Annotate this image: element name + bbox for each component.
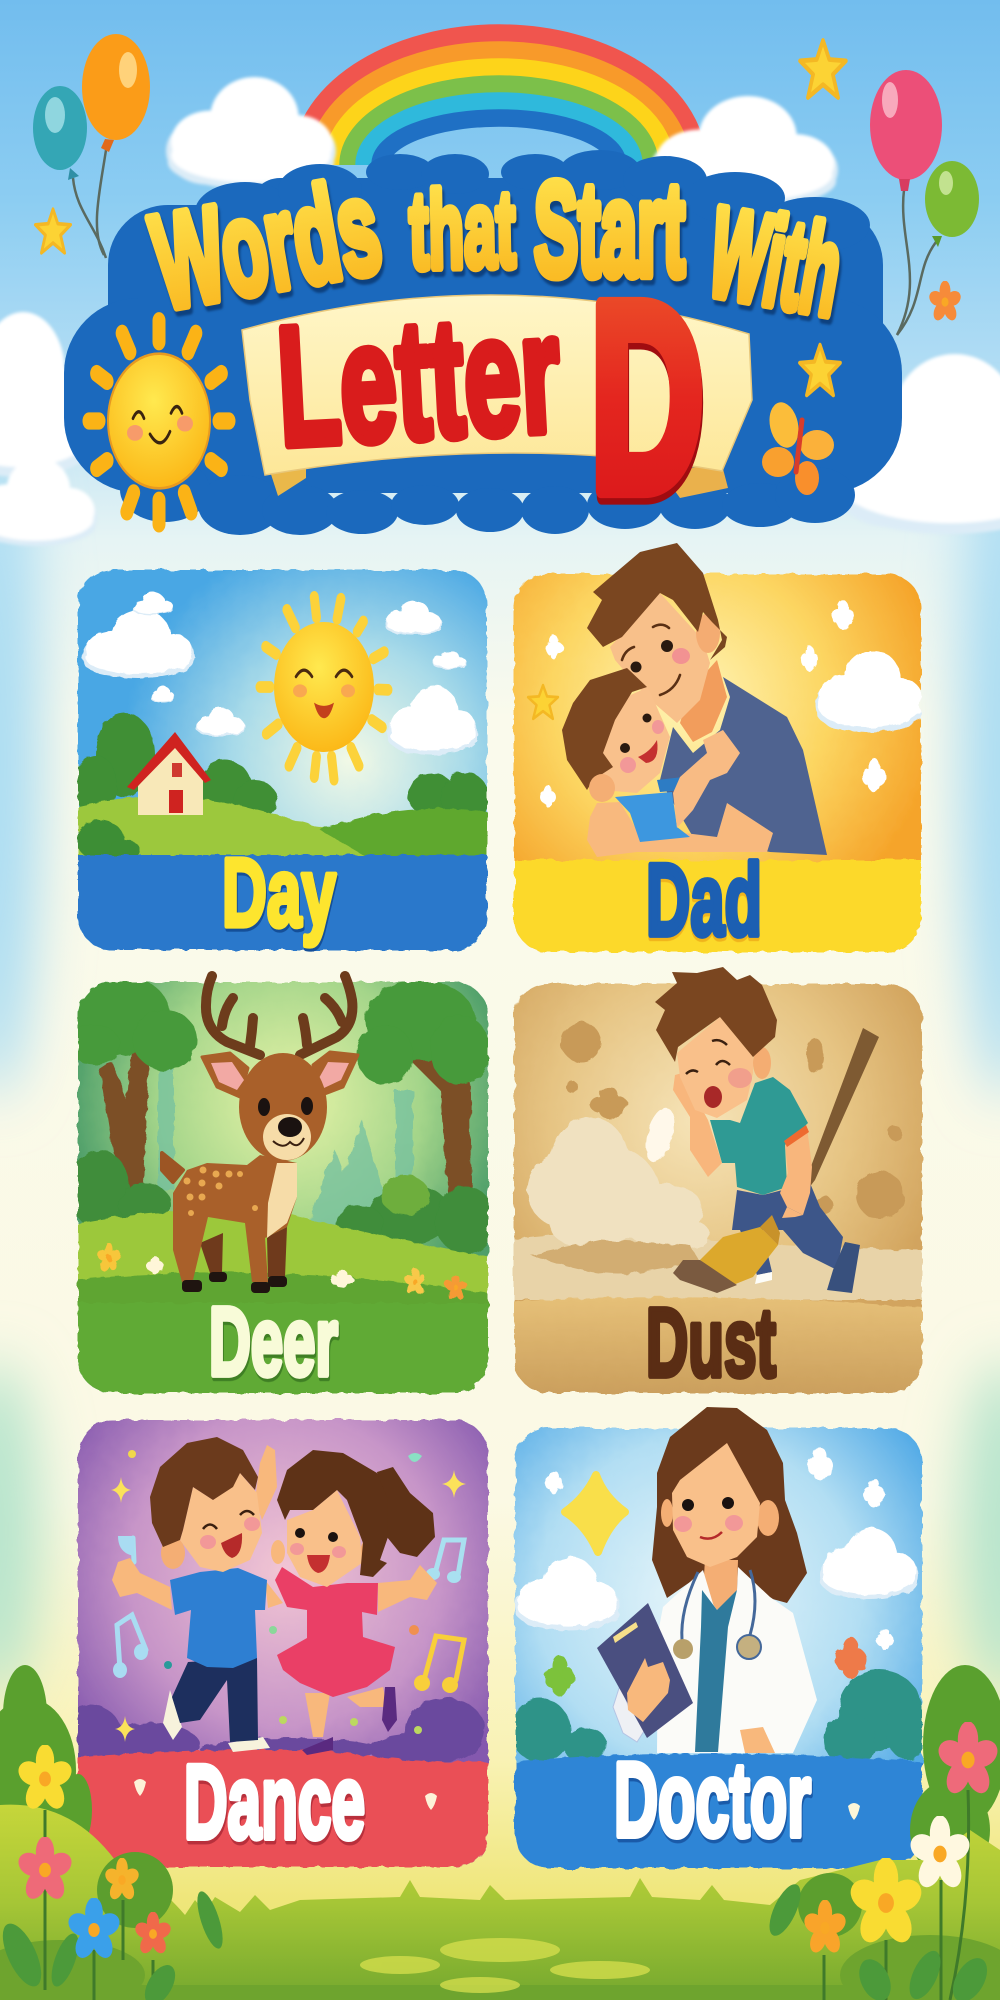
word label: Dance: Dance [184,1744,365,1861]
icon: yellow star [565,1475,625,1552]
hearts [134,1779,437,1810]
heading: Letter D: D [590,248,704,548]
heading: Words that Start With: Start [534,155,685,304]
boy and girl dancing [112,1437,437,1755]
sky scene [505,1420,930,1880]
sparkles [111,1450,466,1742]
deer figure [162,976,358,1293]
icon: house [127,732,211,815]
word label: Dust: Dust [646,1289,776,1398]
word label: Dad: Dad [646,842,762,957]
heading: Words that Start With: With [699,182,852,343]
word label: Doctor: Doctor [614,1742,811,1859]
doctor figure [597,1407,817,1753]
panel: Doctor [505,1407,930,1880]
heading: Words that Start With: that [408,169,516,292]
forest scene [70,975,495,1400]
flower cluster: right [763,1721,1000,2000]
musical notes [113,1536,464,1693]
scene background and sparkles [505,565,930,960]
dusty scene [505,975,930,1400]
banner scroll [242,295,752,498]
word label: Day: Day [222,839,336,947]
rainbow [300,33,698,165]
balloons [33,34,979,335]
boy sweeping with broom [655,967,879,1293]
heading: Letter D [273,248,704,548]
icon: star [528,685,558,719]
heading: Words that Start With [142,150,852,343]
panel: Dust [505,967,930,1400]
icon: butterfly [762,400,834,495]
purple scene and musical notes [76,1418,490,1868]
icon: smiling sun [260,597,388,780]
panel: Day [70,560,500,960]
scene: sky, sun, house and hills [70,560,500,960]
icon: small orange flower [928,281,962,324]
stars around header [35,40,846,395]
heading: Words that Start With: Words [142,150,391,337]
panel: Deer [70,975,495,1400]
white clouds behind header [0,77,1000,546]
heading: Letter D: Letter [273,278,565,481]
flower cluster: left [0,1744,228,2000]
panel: Dance [76,1418,490,1868]
heart [848,1803,860,1820]
meadow with grass [0,1665,1000,2000]
icon: smiling sun [89,321,229,524]
title cloud panel [64,150,902,535]
panel: Dad [505,543,930,960]
word label: Deer: Deer [209,1288,338,1397]
father and child figures [562,543,827,857]
